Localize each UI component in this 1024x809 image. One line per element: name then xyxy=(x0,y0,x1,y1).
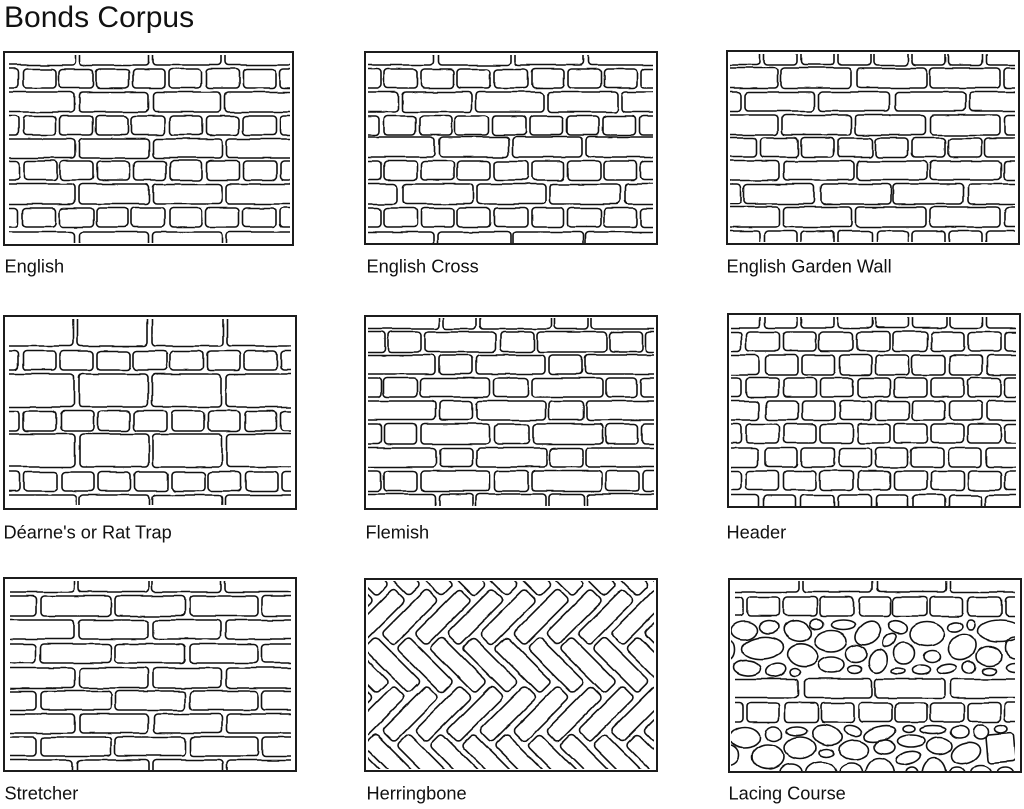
panel: Déarne's or Rat Trap bond xyxy=(0,300,300,542)
frame: Déarne's or Rat Trap xyxy=(4,316,296,509)
panel: Header bond xyxy=(727,313,1021,538)
brick courses: Déarne's or Rat Trap xyxy=(9,319,291,505)
label: Stretcher: Stretcher xyxy=(4,784,78,804)
frame: English xyxy=(4,52,293,245)
label: English Garden Wall: English Garden Wall xyxy=(726,256,892,276)
label: English Cross: English Cross xyxy=(366,256,479,276)
label: Lacing Course: Lacing Course xyxy=(728,784,846,804)
label: English: English xyxy=(4,256,64,276)
label: Header: Header xyxy=(726,522,786,542)
brick courses: Herringbone xyxy=(368,581,654,769)
frame: Header xyxy=(728,314,1020,507)
frame: Flemish xyxy=(365,316,657,509)
panel: English bond xyxy=(0,40,300,276)
rubble stones: Lacing Course xyxy=(731,618,1015,771)
brick courses: Header xyxy=(731,317,1016,506)
brick courses: English xyxy=(9,55,290,243)
frame: English Garden Wall xyxy=(727,51,1019,244)
panel: Flemish bond xyxy=(364,315,658,538)
panel: Herringbone bond xyxy=(364,578,658,804)
frame: Herringbone xyxy=(365,579,657,771)
frame: English Cross xyxy=(365,52,657,244)
label: Déarne's or Rat Trap: Déarne's or Rat Trap xyxy=(4,522,172,542)
frame: Lacing Course xyxy=(729,579,1021,772)
brick courses: Lacing Course xyxy=(735,581,1015,724)
label: Herringbone: Herringbone xyxy=(366,784,467,804)
brick courses: English Cross xyxy=(368,55,653,243)
panel: Lacing Course xyxy=(717,565,1024,804)
frame: Stretcher xyxy=(4,578,296,771)
panel: English Garden Wall bond xyxy=(720,40,1024,276)
brick courses: English Garden Wall xyxy=(730,54,1015,242)
label: Flemish: Flemish xyxy=(366,522,429,542)
panel: English Cross bond xyxy=(358,40,663,276)
brick courses: Stretcher xyxy=(10,581,291,770)
panel: Stretcher bond xyxy=(0,565,300,804)
brick courses: Flemish xyxy=(368,318,654,506)
title: Bonds Corpus xyxy=(4,1,194,34)
